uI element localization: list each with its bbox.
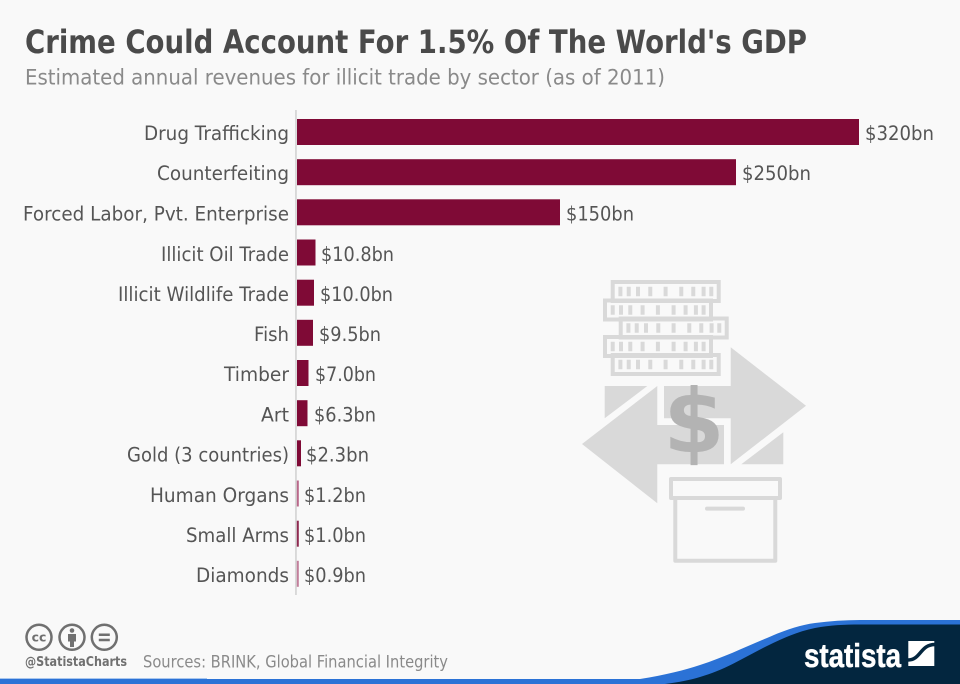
source: Sources: BRINK, Global Financial Integrity xyxy=(143,652,448,672)
footer band xyxy=(0,620,960,684)
handle: @StatistaCharts xyxy=(25,655,127,670)
row: Human Organs: $1.2bn xyxy=(304,484,366,507)
row: Illicit Oil Trade xyxy=(161,240,394,266)
row: Small Arms: $1.0bn xyxy=(304,524,366,547)
row: Counterfeiting xyxy=(157,159,811,185)
row: Illicit Wildlife Trade: Illicit Wildlife Trade xyxy=(118,283,289,306)
row: Illicit Wildlife Trade xyxy=(118,280,393,306)
statista logo xyxy=(804,637,935,674)
row: Gold: Gold (3 countries) xyxy=(127,444,289,466)
row: Drug Trafficking: Drug Trafficking xyxy=(144,122,289,145)
axis line xyxy=(295,110,297,595)
row: Fish: $9.5bn xyxy=(319,323,381,346)
logo mark xyxy=(908,641,935,666)
illustration: money, arrows and box xyxy=(582,282,806,561)
subtitle: Estimated annual revenues for illicit trade by sector (as of 2011) xyxy=(25,66,665,90)
icon: exchange arrows xyxy=(582,347,806,503)
row: Counterfeiting: $250bn xyxy=(742,162,811,185)
row: Diamonds: Diamonds xyxy=(196,564,289,587)
row: Illicit Oil Trade: Illicit Oil Trade xyxy=(161,243,289,266)
row: Small Arms: Small Arms xyxy=(186,524,289,547)
row: Timber: Timber xyxy=(223,363,290,386)
row: Illicit Wildlife Trade: $10.0bn xyxy=(320,283,393,306)
bar chart xyxy=(23,119,934,587)
row: Diamonds xyxy=(196,561,366,587)
row: Small Arms xyxy=(186,521,366,547)
row: Art: $6.3bn xyxy=(314,404,376,426)
icon: no derivatives xyxy=(92,625,117,650)
row: Human Organs: Human Organs xyxy=(150,484,289,507)
icon: coin stack xyxy=(605,282,727,374)
icon: attribution xyxy=(60,625,84,650)
row: Drug Trafficking xyxy=(144,119,934,145)
row: Forced Labor: Forced Labor, Pvt. Enterprise xyxy=(23,202,289,226)
icon: creative commons licence xyxy=(26,625,117,650)
icon: cc: cc xyxy=(32,630,46,644)
logo wordmark: statista xyxy=(804,637,902,674)
row: Timber: $7.0bn xyxy=(315,363,376,386)
row: Gold xyxy=(127,440,369,466)
row: Art: Art xyxy=(261,404,289,426)
row: Art xyxy=(261,400,376,426)
row: Forced Labor xyxy=(23,199,634,226)
row: Human Organs xyxy=(150,480,366,507)
row: Forced Labor: $150bn xyxy=(566,202,634,226)
row: Drug Trafficking: $320bn xyxy=(865,122,934,145)
row: Fish: Fish xyxy=(254,323,289,346)
row: Diamonds: $0.9bn xyxy=(304,564,366,587)
row: Gold: $2.3bn xyxy=(306,444,369,466)
row: Fish xyxy=(254,320,381,346)
row: Timber xyxy=(223,360,376,386)
icon: dollar sign: $ xyxy=(663,370,725,473)
title: Crime Could Account For 1.5% Of The World's GDP xyxy=(25,23,807,61)
icon: box xyxy=(671,479,780,561)
row: Counterfeiting: Counterfeiting xyxy=(157,162,289,185)
row: Illicit Oil Trade: $10.8bn xyxy=(321,243,394,266)
